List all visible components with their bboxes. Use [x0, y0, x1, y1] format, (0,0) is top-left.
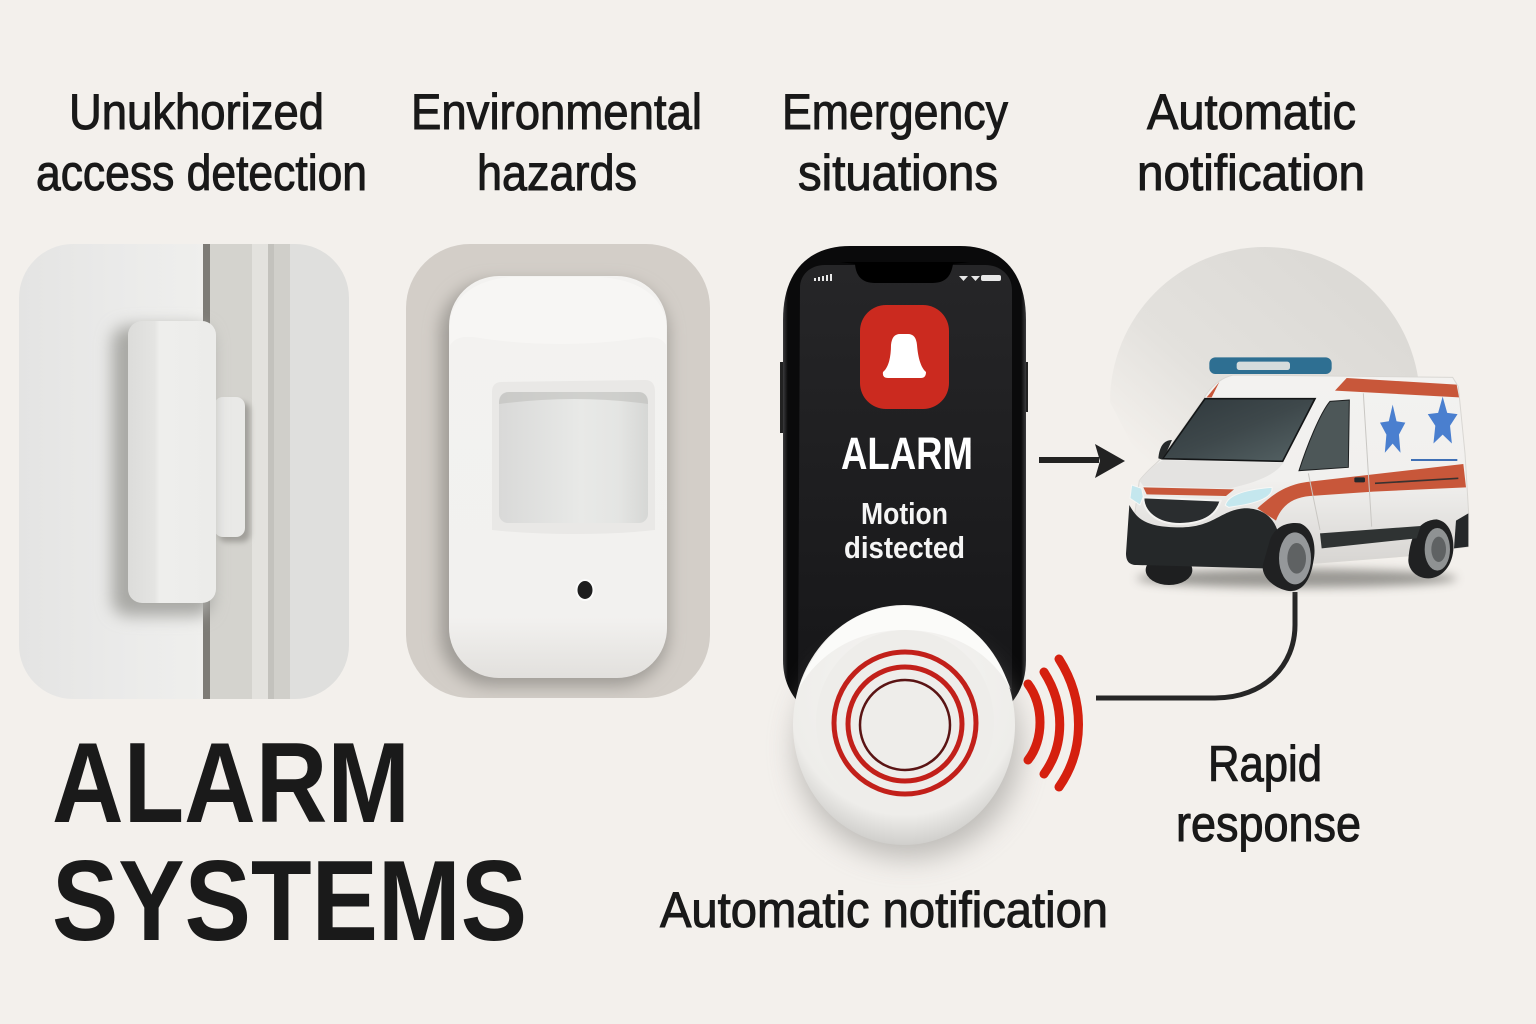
lower stripe — [1257, 464, 1466, 521]
door marks — [1375, 478, 1458, 483]
side buttons — [780, 362, 1028, 433]
sensor body — [112, 321, 216, 616]
heading: unauthorized access detection: Unukhorized — [69, 84, 324, 140]
phone frame — [783, 246, 1026, 710]
title: ALARM — [52, 720, 410, 847]
magnet block — [214, 397, 250, 542]
roof beacon — [1209, 357, 1332, 374]
blue line — [1411, 459, 1457, 461]
hood shading — [1139, 460, 1283, 488]
sensor lens — [499, 392, 648, 523]
phone message: Motion — [861, 496, 948, 531]
sensor LED — [576, 580, 594, 600]
heading: environmental hazards: hazards — [477, 145, 637, 201]
alarm app icon — [860, 305, 949, 409]
side window — [1299, 400, 1349, 471]
ground shadow — [1137, 569, 1457, 588]
rear wheel — [1408, 519, 1453, 578]
panel: motion sensor — [406, 244, 710, 698]
heading: emergency situations — [782, 84, 1008, 201]
heading: unauthorized access detection — [36, 84, 367, 201]
label: rapid response — [1176, 736, 1361, 852]
front bumper — [1126, 505, 1277, 568]
grille — [1143, 497, 1221, 524]
signal waves — [1028, 659, 1078, 787]
heading: automatic notification — [1137, 84, 1365, 201]
headlights — [1130, 485, 1272, 507]
phone message: distected — [844, 530, 965, 565]
door seams — [1308, 393, 1372, 530]
upper stripe — [1207, 378, 1459, 397]
heading: environmental hazards — [411, 84, 702, 201]
halo behind ambulance — [1110, 247, 1420, 480]
arrow to ambulance — [1039, 444, 1125, 478]
status bar — [814, 274, 1001, 281]
panel: door contact sensor — [19, 244, 349, 699]
sensor housing — [449, 276, 667, 678]
hood stripe — [1143, 487, 1234, 496]
phone — [780, 246, 1028, 710]
phone message — [844, 496, 965, 565]
van body — [1128, 375, 1469, 567]
ambulance — [1126, 357, 1469, 591]
star two — [1428, 397, 1458, 444]
label: rapid response: Rapid — [1208, 736, 1322, 792]
red rings — [834, 652, 976, 794]
windshield — [1163, 399, 1315, 461]
heading: automatic notification: notification — [1137, 145, 1365, 201]
heading: unauthorized access detection: access detection — [36, 145, 367, 201]
heading: emergency situations: Emergency — [782, 84, 1008, 140]
label: rapid response: response — [1176, 796, 1361, 852]
front left tyre — [1146, 555, 1192, 585]
heading: environmental hazards: Environmental — [411, 84, 702, 140]
panic button — [793, 605, 1020, 858]
front wheel — [1263, 523, 1315, 591]
title: SYSTEMS — [52, 838, 527, 965]
phone alarm text: ALARM — [841, 428, 973, 479]
rear bumper — [1454, 513, 1468, 548]
title — [52, 720, 527, 965]
side mirror — [1158, 440, 1172, 459]
star one — [1380, 405, 1405, 453]
heading: emergency situations: situations — [798, 145, 998, 201]
sill — [1320, 526, 1421, 548]
label: automatic notification: Automatic notification — [660, 882, 1108, 938]
heading: automatic notification: Automatic — [1147, 84, 1356, 140]
connector line — [1096, 592, 1295, 698]
